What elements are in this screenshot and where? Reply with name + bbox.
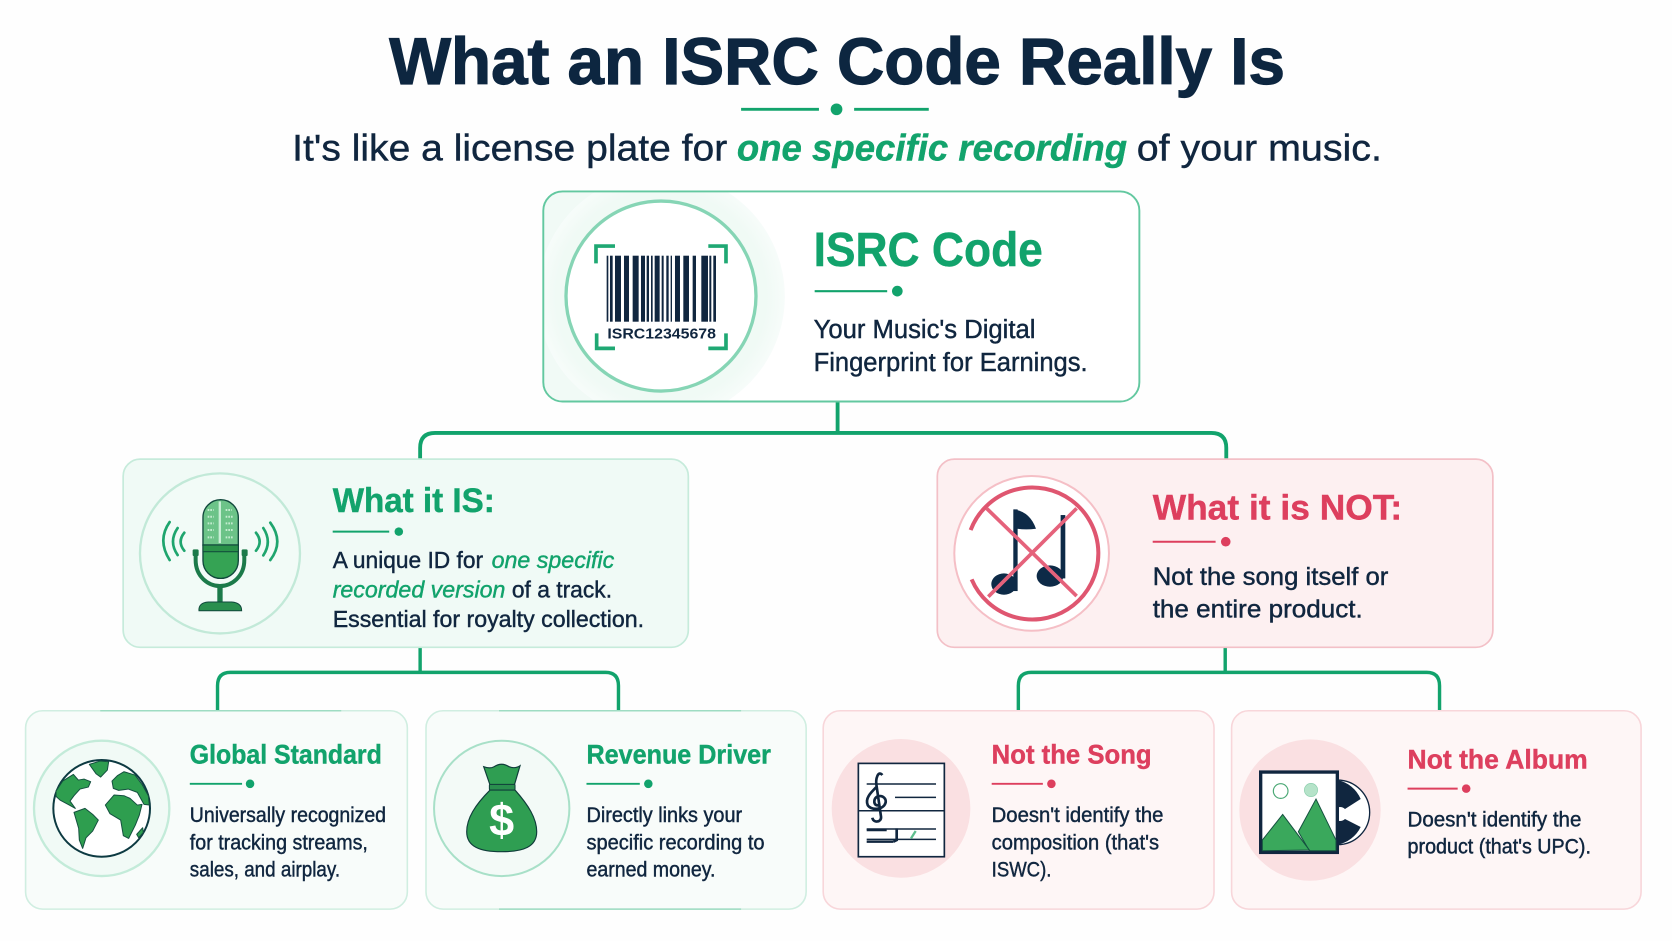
icon: money bag: [434, 741, 569, 876]
text: description: Your Music's Digital: [814, 316, 1035, 344]
divider: [815, 286, 903, 296]
text: description: product (that's UPC).: [1408, 836, 1591, 859]
text: description: Fingerprint for Earnings.: [814, 349, 1088, 377]
text: description: ISWC).: [992, 859, 1051, 882]
text: description: Universally recognized: [190, 804, 386, 827]
heading: Global Standard: Global Standard: [190, 740, 382, 770]
panel: What it IS: [123, 459, 688, 647]
text: description: Directly links your: [586, 804, 742, 827]
text: description: [1408, 808, 1591, 859]
text: description: the entire product.: [1153, 596, 1363, 623]
text: description: [586, 804, 765, 882]
subtitle: one specific recording: [737, 126, 1127, 168]
text: description: Doesn't identify the: [992, 804, 1163, 827]
divider: [992, 780, 1056, 788]
panel: Global Standard: [26, 711, 407, 909]
divider: [1153, 537, 1231, 547]
icon: barcode: ISRC12345678: [607, 326, 716, 342]
panel: ISRC Code: [542, 190, 1140, 402]
panel: Not the Song: [823, 711, 1214, 909]
text: description: Essential for royalty collection.: [333, 606, 644, 632]
panel: Not the Album: [1232, 711, 1641, 909]
text: description: A unique ID for: [333, 547, 483, 573]
text: description: sales, and airplay.: [190, 859, 340, 882]
divider: [333, 527, 403, 536]
panel: What it is NOT: [937, 459, 1493, 647]
text: description: Not the song itself or: [1153, 564, 1388, 591]
icon: album cover and vinyl: [1239, 739, 1381, 881]
connectors: left branch: [218, 647, 618, 710]
text: description: specific recording to: [586, 831, 765, 854]
heading: Not the Song: Not the Song: [992, 740, 1152, 770]
connectors: top level tree: [420, 402, 1226, 459]
text: description: [190, 804, 386, 882]
heading: What it IS: What it IS:: [333, 482, 495, 520]
icon: money bag: $: [489, 794, 514, 845]
subtitle: It's like a license plate for: [292, 126, 727, 168]
subtitle: of your music.: [1137, 126, 1382, 168]
heading: Revenue Driver: Revenue Driver: [586, 740, 771, 770]
heading: What it is NOT: What it is NOT:: [1153, 488, 1402, 527]
icon: globe: [34, 741, 169, 876]
divider: [1408, 784, 1470, 793]
icon: crossed-out music note: [954, 476, 1109, 631]
text: description: one specific: [492, 547, 615, 573]
text: description: [992, 804, 1163, 882]
subtitle: [292, 126, 1382, 168]
icon: microphone: [140, 473, 300, 633]
text: description: composition (that's: [992, 831, 1159, 854]
icon: barcode: [566, 201, 756, 391]
title: What an ISRC Code Really Is: [389, 25, 1285, 99]
icon: sheet music: [832, 739, 970, 878]
heading: Not the Album: Not the Album: [1408, 744, 1588, 774]
connectors: right branch: [1018, 647, 1440, 710]
title divider: [741, 103, 929, 115]
text: description: [814, 316, 1088, 377]
text: description: of a track.: [512, 577, 612, 603]
text: description: for tracking streams,: [190, 831, 368, 854]
divider: [586, 780, 653, 788]
text: description: [333, 547, 644, 632]
panel: Revenue Driver: [426, 711, 806, 909]
text: description: Doesn't identify the: [1408, 808, 1581, 831]
divider: [190, 780, 254, 788]
text: description: earned money.: [586, 859, 716, 882]
heading: ISRC Code: ISRC Code: [814, 224, 1043, 277]
text: description: recorded version: [333, 577, 505, 603]
text: description: [1153, 564, 1388, 623]
